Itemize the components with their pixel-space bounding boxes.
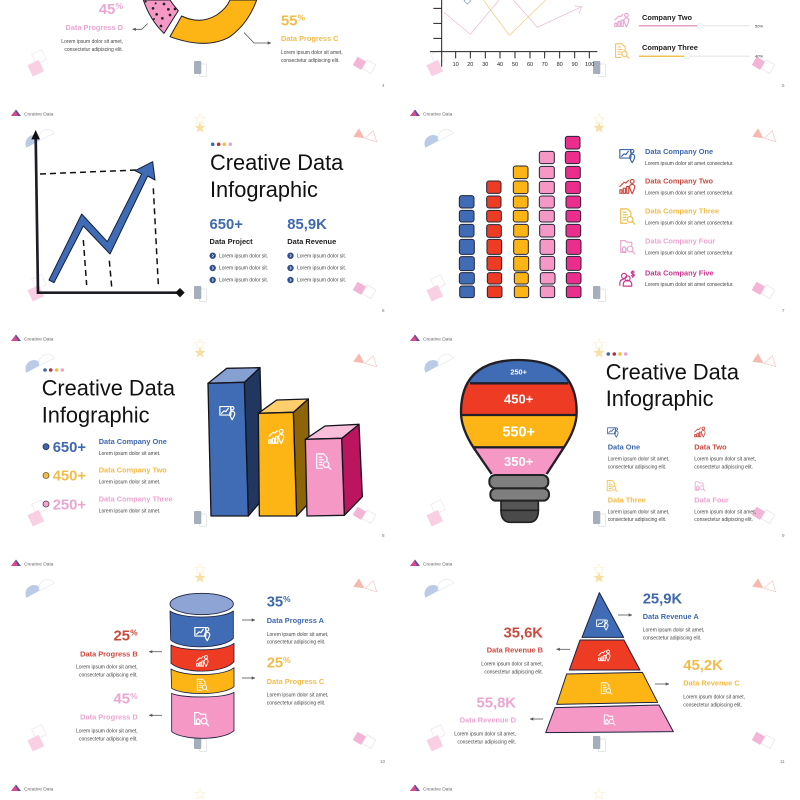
stat: company one: Lorem ipsum dolor sit amet. — [99, 451, 160, 457]
list item: company four — [621, 237, 734, 256]
icon: growth — [197, 656, 208, 667]
stat: data project — [210, 217, 268, 284]
block: progress A: consectetur adipiscing elit. — [267, 640, 325, 646]
block: data two: Data Two — [694, 442, 727, 451]
block: revenue C: consectetur adipiscing elit. — [683, 702, 742, 708]
block: revenue A: 25,9K — [643, 591, 682, 607]
stat: data project: 650+ — [210, 217, 243, 233]
arrow: revenue C — [655, 683, 669, 685]
slider: company two: Company Two — [642, 13, 692, 22]
block: revenue B — [481, 625, 543, 676]
light bulb chart: 450+ — [504, 392, 534, 407]
stat: company two — [43, 466, 167, 486]
stat: data revenue: Data Revenue — [287, 237, 336, 246]
block: progress C: 25 — [267, 656, 283, 672]
block: revenue A: consectetur adipiscing elit. — [643, 636, 701, 642]
list item: company two — [620, 177, 734, 197]
stat: company three — [43, 495, 173, 515]
stat: data project: Lorem ipsum dolor sit. — [219, 266, 268, 272]
list item: company one — [620, 147, 734, 167]
text block: progress C: 55 — [281, 14, 297, 30]
slider: company three: Company Three — [642, 43, 698, 52]
text block: progress D: 45 — [99, 2, 115, 18]
light bulb chart: 250+ — [510, 367, 527, 376]
slide 13 top edge — [410, 784, 604, 799]
title: Infographic — [210, 177, 318, 202]
colour dots — [606, 352, 628, 356]
block: data three: consectetur adipiscing elit. — [608, 517, 666, 523]
axis labels: 30 — [482, 62, 488, 68]
text block: progress D: consectetur adipiscing elit. — [64, 47, 123, 53]
list item: company four: Data Company Four — [645, 237, 715, 246]
list item: company two: Data Company Two — [645, 177, 714, 186]
text block: progress C: % — [298, 12, 306, 22]
light bulb chart: 350+ — [504, 454, 534, 469]
block: revenue A — [643, 591, 704, 642]
axis labels — [453, 62, 594, 68]
icon: growth on yellow bar — [269, 429, 284, 444]
icon: document — [197, 679, 208, 691]
cylinder chart — [170, 593, 234, 738]
logo label: Creative Data — [423, 336, 453, 342]
list item: company three — [621, 207, 734, 226]
slider: company three — [616, 43, 763, 59]
slider: company two — [615, 13, 763, 29]
slide 11: pyramid — [410, 560, 785, 764]
stat: data revenue: Lorem ipsum dolor sit. — [297, 266, 346, 272]
arrow: revenue D — [530, 718, 543, 720]
block: progress C: % — [283, 655, 291, 665]
page number: 9 — [782, 533, 785, 538]
logo label: Creative Data — [24, 786, 54, 792]
stat: company one: Data Company One — [99, 437, 167, 446]
block: data four: Lorem ipsum dolor sit amet, — [694, 509, 756, 515]
block: progress D: Lorem ipsum dolor sit amet, — [76, 728, 138, 734]
axis labels: 40 — [497, 62, 503, 68]
block: data one — [608, 428, 669, 470]
list item: company five: Lorem ipsum dolor sit amet consectetur. — [645, 282, 734, 288]
block: revenue D: Lorem ipsum dolor sit amet, — [454, 732, 516, 738]
stat: data revenue — [287, 217, 346, 284]
icon: document on pink bar — [317, 454, 331, 469]
block: data four: Data Four — [694, 495, 729, 504]
3D bar chart — [208, 368, 362, 516]
list item: company five: Data Company Five — [645, 268, 714, 277]
block: data one: Data One — [608, 442, 640, 451]
block: progress B: % — [130, 628, 138, 638]
stat: company two: 450+ — [53, 469, 86, 485]
arrow: progress C — [244, 32, 271, 43]
slide 8: 3D bars — [11, 334, 385, 538]
text block: progress D: Lorem ipsum dolor sit amet, — [61, 39, 123, 45]
icon: chart — [195, 628, 210, 641]
stat: company three: Data Company Three — [99, 495, 173, 504]
block: data three — [607, 481, 669, 523]
logo label: Creative Data — [24, 336, 54, 342]
axis labels: 20 — [467, 62, 473, 68]
title: Infographic — [42, 403, 150, 428]
light bulb chart — [457, 358, 580, 522]
slider: company two: 50% — [755, 24, 763, 28]
stat: company two: Data Company Two — [99, 466, 167, 475]
block: progress B: consectetur adipiscing elit. — [79, 673, 138, 679]
text block: progress C — [281, 12, 343, 64]
block: revenue A: Lorem ipsum dolor sit amet, — [643, 628, 704, 634]
block: progress A: % — [283, 594, 291, 604]
axis labels: 90 — [572, 62, 578, 68]
stat: company two: Lorem ipsum dolor sit amet. — [99, 480, 160, 486]
arrow: revenue B — [556, 648, 570, 650]
block: progress A: Data Progress A — [267, 616, 325, 625]
colour dots — [43, 368, 64, 372]
text block: progress C: consectetur adipiscing elit. — [281, 58, 340, 64]
block: progress D: Data Progress D — [80, 713, 138, 722]
block: progress B: Lorem ipsum dolor sit amet, — [76, 665, 138, 671]
icon: chart on blue bar — [220, 407, 235, 420]
block: revenue B: Data Revenue B — [487, 646, 543, 655]
axis labels: 60 — [527, 62, 533, 68]
stat: data project: Lorem ipsum dolor sit. — [219, 254, 268, 260]
list item: company five — [620, 268, 734, 288]
block: progress A: 35 — [267, 595, 283, 611]
slider: company three: 40% — [755, 54, 763, 58]
list item: company three: Lorem ipsum dolor sit amet consectetur. — [645, 220, 734, 226]
block: revenue B: consectetur adipiscing elit. — [484, 670, 543, 676]
stat: company three: 250+ — [53, 497, 86, 513]
logo label: Creative Data — [24, 562, 54, 568]
block: progress A — [267, 594, 328, 646]
text block: progress D — [61, 1, 124, 53]
list item: company three: Data Company Three — [645, 207, 719, 216]
block: progress B: Data Progress B — [80, 649, 138, 658]
logo label: Creative Data — [423, 786, 453, 792]
block: data two: consectetur adipiscing elit. — [694, 464, 753, 470]
list item: company one: Lorem ipsum dolor sit amet consectetur. — [645, 161, 734, 167]
block: revenue C: Data Revenue C — [683, 679, 740, 688]
arrow: progress B — [149, 651, 162, 653]
page number: 10 — [380, 759, 386, 764]
stat: data revenue: Lorem ipsum dolor sit. — [297, 278, 346, 284]
block: revenue B: 35,6K — [504, 625, 543, 641]
stat: company one: 650+ — [53, 440, 86, 456]
text block: progress D: Data Progress D — [65, 23, 124, 32]
axis labels: 70 — [542, 62, 548, 68]
logo label: Creative Data — [423, 562, 453, 568]
colour dots — [211, 142, 232, 146]
block: progress D: consectetur adipiscing elit. — [79, 736, 138, 742]
stat: data project: Data Project — [210, 237, 253, 246]
stat: company three: Lorem ipsum dolor sit amet. — [99, 509, 160, 515]
list item: company two: Lorem ipsum dolor sit amet consectetur. — [645, 191, 734, 197]
title: Creative Data — [606, 359, 740, 384]
light bulb chart: 550+ — [502, 424, 535, 440]
block: revenue B: Lorem ipsum dolor sit amet, — [481, 662, 543, 668]
icon: folder — [604, 715, 615, 725]
axis labels: 50 — [512, 62, 518, 68]
slide 7: stacked block bars — [410, 110, 785, 313]
title: Infographic — [606, 386, 714, 411]
slide 6: growth arrow chart — [11, 110, 385, 313]
list item: company one: Data Company One — [645, 147, 713, 156]
stat: data revenue: Lorem ipsum dolor sit. — [297, 254, 346, 260]
block: revenue D — [454, 695, 517, 745]
block: revenue A: Data Revenue A — [643, 612, 699, 621]
block: revenue C: 45,2K — [683, 658, 723, 674]
block: progress C: Lorem ipsum dolor sit amet, — [267, 693, 328, 699]
block: data four — [694, 482, 756, 523]
text block: progress D: % — [115, 1, 123, 11]
block: data three: Lorem ipsum dolor sit amet, — [608, 509, 669, 515]
block: progress D — [76, 691, 138, 742]
block: progress D: 45 — [114, 692, 130, 708]
title: Creative Data — [210, 150, 344, 175]
block: progress C — [267, 655, 328, 706]
block: data one: consectetur adipiscing elit. — [608, 464, 666, 470]
donut chart — [143, 0, 257, 43]
block: data two — [694, 427, 756, 470]
block: revenue C: Lorem ipsum dolor sit amet, — [683, 694, 745, 700]
text block: progress C: Lorem ipsum dolor sit amet, — [281, 50, 343, 56]
arrow: progress D — [149, 714, 162, 716]
block: progress A: Lorem ipsum dolor sit amet, — [267, 632, 328, 638]
block: data three: Data Three — [608, 495, 646, 504]
axis labels: 100 — [585, 62, 594, 68]
text block: progress C: Data Progress C — [281, 34, 339, 43]
block: revenue D: 55,8K — [476, 695, 516, 711]
icon: folder — [195, 713, 209, 726]
block: progress B: 25 — [114, 628, 130, 644]
page number: 7 — [782, 308, 785, 313]
arrow: revenue A — [618, 614, 632, 616]
arrow chart — [31, 130, 185, 297]
page number: 11 — [780, 759, 785, 764]
logo label: Creative Data — [423, 112, 453, 118]
icon: document — [601, 683, 612, 694]
page number: 4 — [382, 83, 385, 88]
block: revenue D: Data Revenue D — [460, 716, 517, 725]
logo label: Creative Data — [24, 112, 54, 118]
stat: data revenue: 85,9K — [287, 217, 327, 233]
page number: 5 — [782, 83, 785, 88]
block: progress C: Data Progress C — [267, 677, 325, 686]
slide 9: light bulb — [410, 334, 785, 538]
arrow: progress C — [242, 677, 255, 679]
block: revenue D: consectetur adipiscing elit. — [457, 739, 516, 745]
pyramid chart — [546, 593, 673, 733]
icon: chart — [597, 620, 608, 630]
block: data two: Lorem ipsum dolor sit amet, — [694, 456, 756, 462]
block bar chart — [459, 136, 581, 298]
block: progress C: consectetur adipiscing elit. — [267, 700, 325, 706]
page number: 6 — [382, 308, 385, 313]
slide 10: cylinder — [11, 560, 386, 764]
list item: company four: Lorem ipsum dolor sit amet consectetur. — [645, 250, 734, 256]
arrow: progress D — [132, 24, 148, 29]
slide 12 top edge — [11, 784, 205, 799]
axis labels: 80 — [557, 62, 563, 68]
block: data four: consectetur adipiscing elit. — [694, 517, 753, 523]
arrow: progress A — [242, 619, 255, 621]
page number: 8 — [382, 533, 385, 538]
stat: data project: Lorem ipsum dolor sit. — [219, 278, 268, 284]
slide 5: line chart fragment — [410, 0, 785, 88]
block: progress B — [76, 628, 138, 679]
title: Creative Data — [42, 376, 176, 401]
axis labels: 10 — [453, 62, 459, 68]
slide 4: donut chart fragment — [11, 0, 385, 88]
block: progress D: % — [130, 691, 138, 701]
block: data one: Lorem ipsum dolor sit amet, — [608, 456, 669, 462]
icon: growth — [599, 650, 610, 661]
stat: company one — [43, 437, 167, 457]
block: revenue C — [683, 658, 745, 708]
line chart — [430, 0, 597, 67]
